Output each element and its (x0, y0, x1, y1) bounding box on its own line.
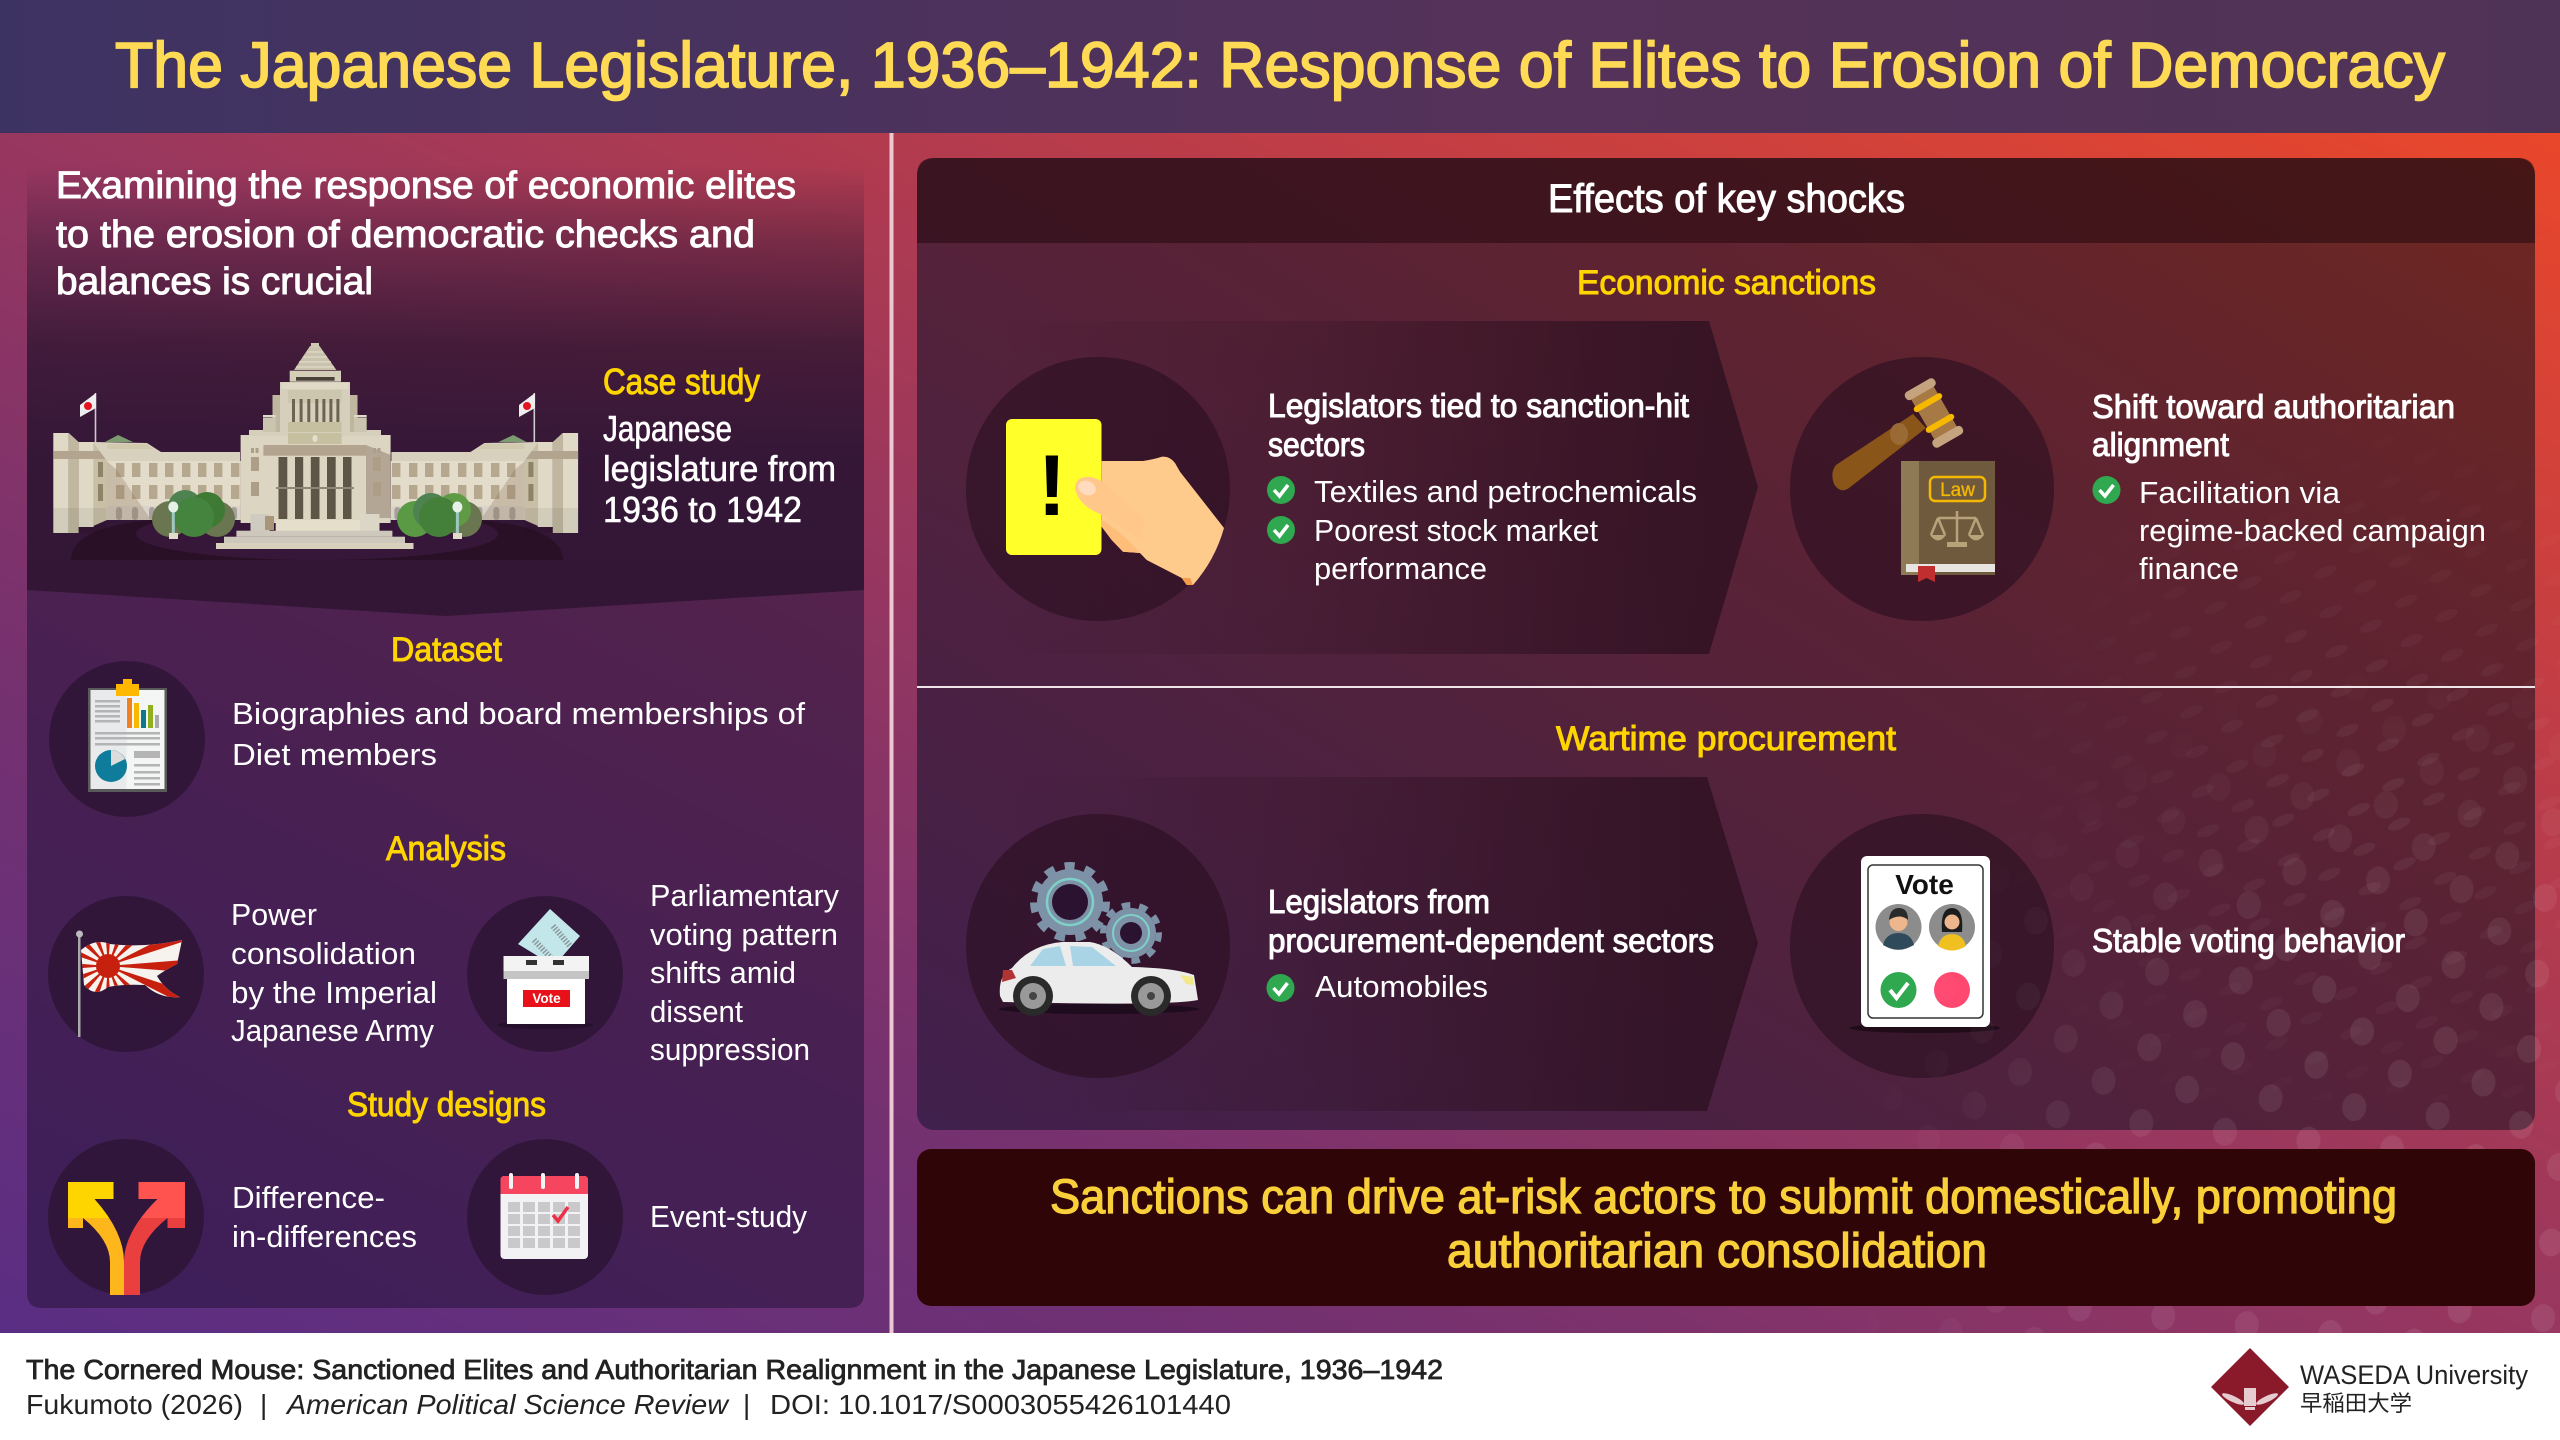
text: shift toward authoritarian alignment (2092, 388, 2486, 586)
heading: examining the response: balances is crucial (56, 261, 373, 303)
heading: examining the response (56, 165, 796, 303)
logo: waseda university: WASEDA University (2300, 1360, 2528, 1390)
text: shift toward authoritarian alignment: regime-backed campaign (2139, 513, 2486, 548)
heading: study designs: Study designs (347, 1086, 546, 1124)
icon: vote card (1790, 814, 2054, 1078)
citation details (26, 1389, 1231, 1420)
check icon (2092, 476, 2120, 504)
logo: waseda university (2211, 1348, 2528, 1426)
panel: left context (8, 165, 864, 1308)
text: dataset description: Biographies and board memberships of (232, 696, 805, 731)
section: dataset (49, 631, 805, 817)
icon: gavel and law book: Law (1940, 480, 1975, 501)
text: case study: 1936 to 1942 (603, 489, 802, 530)
heading: examining the response: Examining the response of economic elites (56, 165, 796, 207)
icon: calendar (467, 1139, 623, 1295)
icon: gears and car (966, 814, 1230, 1078)
section: analysis (8, 830, 839, 1067)
text: shift toward authoritarian alignment: Shift toward authoritarian (2092, 388, 2455, 425)
text: legislators tied to sanction-hit sectors: Poorest stock market (1314, 513, 1598, 548)
text: case study: legislature from (603, 448, 836, 489)
right wing (391, 433, 578, 533)
text: legislators tied to sanction-hit sectors (1267, 387, 1697, 586)
text: dataset description: Diet members (232, 737, 437, 772)
icon: ballot box: Vote (532, 991, 561, 1006)
icon: yellow card (966, 357, 1230, 621)
central block (241, 343, 391, 523)
text: shift toward authoritarian alignment: finance (2139, 551, 2239, 586)
icon: gavel and law book (1790, 357, 2054, 621)
callout: conclusion banner: Sanctions can drive at-risk actors to submit domestically, promoting (1050, 1171, 2397, 1224)
logo: waseda university: 早稲田大学 (2300, 1391, 2412, 1416)
callout: conclusion banner: authoritarian consolidation (1447, 1225, 1987, 1278)
panel header (917, 158, 2535, 243)
text: parliamentary voting: shifts amid (650, 955, 796, 990)
text: legislators tied to sanction-hit sectors: Legislators tied to sanction-hit (1268, 387, 1689, 424)
stairs (216, 514, 414, 549)
text: parliamentary voting: suppression (650, 1032, 810, 1067)
section: wartime procurement (966, 720, 2405, 1111)
icon: ballot box (467, 896, 623, 1052)
icon: diverging arrows (48, 1139, 204, 1295)
flag left (80, 393, 96, 443)
icon: yellow card: ! (1038, 438, 1066, 534)
section: study designs (48, 1086, 807, 1295)
citation details: | (743, 1389, 750, 1420)
text: difference in differences: in-differences (232, 1219, 417, 1254)
callout: conclusion banner (917, 1149, 2535, 1306)
icon: national diet building (53, 343, 578, 560)
text: case study: Japanese (603, 408, 732, 449)
text: difference in differences (232, 1180, 417, 1254)
text: event study: Event-study (650, 1199, 807, 1234)
icon: clipboard report (49, 661, 205, 817)
text: shift toward authoritarian alignment: Facilitation via (2139, 475, 2341, 510)
text: power consolidation: Power (231, 897, 317, 932)
heading: effects of key shocks: Effects of key shocks (1548, 177, 1905, 221)
text: legislators tied to sanction-hit sectors: Textiles and petrochemicals (1314, 474, 1697, 509)
icon: vote card: Vote (1895, 869, 1954, 900)
check icon (1266, 974, 1294, 1002)
text: legislators tied to sanction-hit sectors: performance (1314, 551, 1487, 586)
divider (890, 133, 894, 1333)
heading: dataset: Dataset (391, 631, 503, 669)
arrow: sanctions to shift (1000, 321, 1758, 654)
text: parliamentary voting: voting pattern (650, 917, 838, 952)
heading: economic sanctions: Economic sanctions (1577, 264, 1876, 302)
citation details: DOI: 10.1017/S0003055426101440 (770, 1389, 1231, 1420)
text: case study: Case study (603, 361, 760, 402)
title: The Japanese Legislature, 1936–1942: Response of Elites to Erosion of Democracy (115, 29, 2445, 101)
text: stable voting behavior: Stable voting behavior (2092, 922, 2405, 959)
citation title: The Cornered Mouse: Sanctioned Elites and Authoritarian Realignment in the Japanese Legislature, 1936–1942 (26, 1354, 1443, 1385)
text: legislators from procurement-dependent sectors (1266, 883, 1714, 1004)
text: case study (603, 361, 836, 530)
text: difference in differences: Difference- (232, 1180, 385, 1215)
text: power consolidation: Japanese Army (231, 1013, 434, 1048)
text: parliamentary voting: Parliamentary (650, 878, 839, 913)
text: dataset description (232, 696, 805, 772)
arrow: procurement to stable voting (1000, 777, 1758, 1111)
citation details: | (260, 1389, 267, 1420)
heading: analysis: Analysis (386, 830, 506, 868)
text: power consolidation (231, 897, 437, 1048)
trees and lamps (152, 490, 482, 539)
panel: effects of key shocks (917, 158, 2535, 1130)
left wing (53, 433, 241, 533)
check icon (1267, 516, 1295, 544)
flag right (519, 393, 535, 443)
check icon (1267, 476, 1295, 504)
text: parliamentary voting (650, 878, 839, 1067)
heading: examining the response: to the erosion of democratic checks and (56, 214, 755, 256)
heading: wartime procurement: Wartime procurement (1556, 720, 1897, 758)
text: power consolidation: by the Imperial (231, 975, 437, 1010)
citation details: American Political Science Review (285, 1389, 730, 1420)
section: economic sanctions (966, 264, 2486, 654)
icon: rising sun flag (48, 896, 204, 1052)
text: power consolidation: consolidation (231, 936, 416, 971)
footer (0, 1333, 2560, 1440)
section divider (917, 686, 2535, 688)
header band (0, 0, 2560, 133)
citation details: Fukumoto (2026) (26, 1389, 243, 1420)
text: legislators from procurement-dependent sectors: Automobiles (1315, 969, 1488, 1004)
text: parliamentary voting: dissent (650, 994, 743, 1029)
panel: case study block (27, 165, 864, 616)
text: legislators from procurement-dependent sectors: procurement-dependent sectors (1268, 922, 1714, 959)
halftone dot decoration (1994, 666, 2560, 1333)
text: shift toward authoritarian alignment: alignment (2092, 426, 2229, 463)
text: legislators from procurement-dependent sectors: Legislators from (1268, 883, 1490, 920)
text: legislators tied to sanction-hit sectors: sectors (1268, 426, 1365, 463)
